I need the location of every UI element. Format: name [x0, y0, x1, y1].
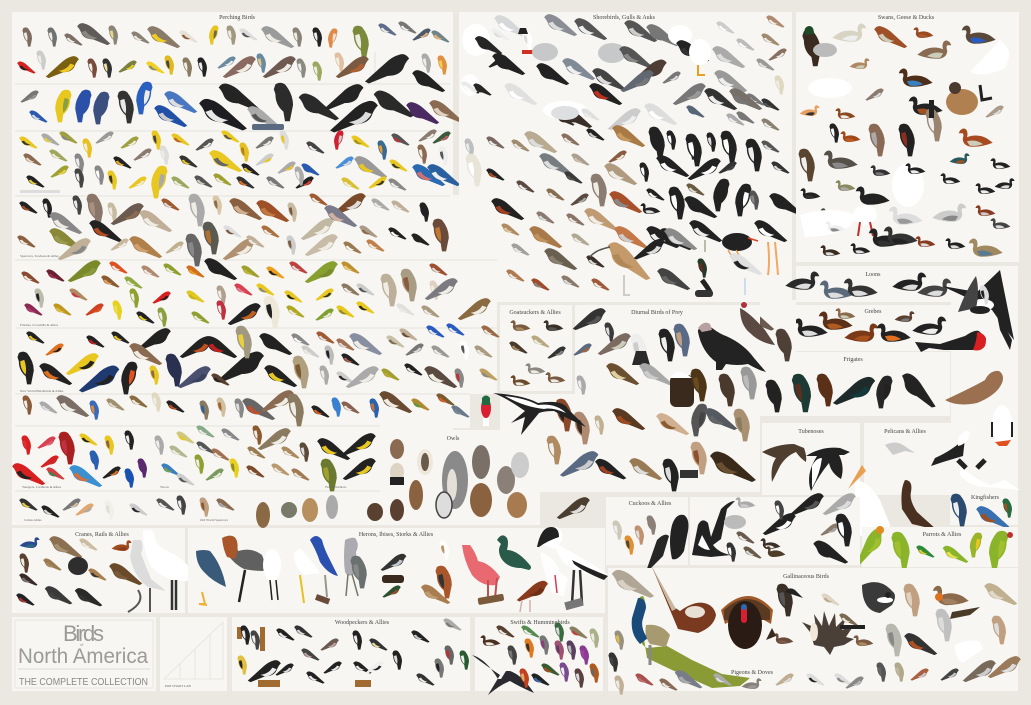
heading: goatsuckers and allies: Goatsuckers & Allies [509, 310, 561, 316]
group: ibises and spoonbills [462, 535, 548, 612]
heading: shorebirds, gulls and auks: Shorebirds, Gulls & Auks [593, 15, 656, 21]
panel: loons [785, 266, 1018, 495]
heading: swans, geese and ducks: Swans, Geese & Ducks [878, 15, 935, 21]
group: waxwings, shrikes, old world sparrows: Cuban Allies [24, 518, 42, 522]
panel: cuckoos and allies [606, 497, 688, 580]
group: oystercatchers and allies [634, 220, 787, 297]
heading: diurnal birds of prey: Diurnal Birds of Prey [631, 309, 683, 316]
group: tanagers and cardinals: Wood-Warblers [325, 485, 347, 489]
group: cormorants [739, 307, 942, 412]
heading: parrots and allies: Parrots & Allies [923, 532, 962, 538]
title: Birds: Birds [63, 621, 104, 646]
heading: kingfishers: Kingfishers [971, 494, 1000, 501]
icon: magnificent frigatebird [915, 270, 1014, 352]
group: swift and hummingbird figures [472, 622, 599, 695]
group: parrot figures [846, 526, 1013, 569]
panel: woodpeckers and allies [232, 617, 470, 691]
group: shearwaters and petrels [692, 493, 856, 564]
group: tanagers and cardinals: Tanagers, Cardinals & Allies [22, 485, 62, 490]
icon: sandhill crane [128, 540, 166, 612]
icon: vulture [698, 302, 775, 372]
heading: gallinaceous birds: Gallinaceous Birds [783, 574, 830, 580]
icon: peacock [632, 596, 750, 688]
heading: grebes: Grebes [864, 309, 882, 315]
panel: title block [12, 617, 156, 691]
panel: parrots and allies [846, 526, 1018, 569]
group: sparrows and allies [17, 193, 449, 266]
group: gulls and terns [461, 14, 787, 131]
group: waxwings, shrikes, old world sparrows: Old World Sparrows [200, 518, 229, 522]
panel: pelicans and allies [848, 405, 1020, 550]
group: owl figures [256, 439, 529, 528]
group: thrushes [22, 390, 470, 426]
heading: owls: Owls [447, 436, 460, 442]
subtitle: the complete collection: THE COMPLETE COLLECTION [19, 677, 148, 688]
group: finches: Finches, Crossbills & Allies [20, 323, 59, 328]
icon: trogon [481, 396, 491, 426]
panel: herons, ibises, storks and allies [188, 527, 608, 613]
panel: gallinaceous birds [608, 567, 1021, 695]
panel: cranes, rails and allies [12, 528, 195, 613]
group: new world flycatchers [17, 21, 450, 92]
panel: perching birds [12, 12, 500, 525]
group: finches [20, 258, 491, 328]
icon: osprey [557, 497, 590, 519]
heading: cranes, rails and allies: Cranes, Rails & Allies [75, 532, 129, 538]
group: blackbirds and orioles: New World Blackbirds & Allies [20, 389, 64, 393]
heading: perching birds: Perching Birds [219, 15, 256, 21]
panel: shorebirds, gulls and auks [459, 12, 802, 302]
panel: tubenoses [762, 423, 860, 495]
group: grouse and partridges [766, 582, 1021, 682]
group: new world warblers [19, 129, 460, 198]
heading: tubenoses: Tubenoses [798, 429, 824, 435]
group: corvids [20, 82, 462, 133]
group: tanagers and cardinals: Vireos [160, 485, 170, 489]
heading: herons, ibises, storks and allies: Herons, Ibises, Storks & Allies [359, 532, 434, 538]
group: sparrows and allies: Sparrows, Towhees & Allies [20, 254, 59, 259]
group: kingfisher figures [950, 494, 1012, 528]
icon: wood stork [537, 527, 608, 610]
title: of: of [80, 642, 84, 647]
heading: frigates: Frigates [843, 357, 863, 363]
group: boobies and anhinga [945, 285, 1007, 427]
panel: grebes [794, 305, 951, 351]
icon: turkey [721, 596, 773, 649]
group: tanagers and cardinals [12, 425, 376, 491]
panel: swans, geese and ducks [796, 12, 1019, 262]
group: blackbirds and orioles [17, 323, 500, 394]
panel: kingfishers [950, 494, 1018, 528]
heading: pigeons and doves: Pigeons & Doves [731, 670, 774, 676]
icon: whooping crane [143, 530, 195, 610]
group: woodpecker figures [237, 618, 469, 687]
group: herons [196, 536, 452, 605]
panel: owls [248, 430, 540, 528]
group: sandpipers and plovers [464, 125, 656, 295]
panel: size guide [160, 617, 227, 691]
heading: swifts and hummingbirds: Swifts & Hummingbirds [510, 619, 570, 626]
group: rails [16, 536, 142, 606]
group: waterfowl [798, 23, 1015, 257]
group: pigeons and doves [608, 630, 864, 695]
icon: swallow-tailed kite [493, 393, 586, 435]
panel: tubenoses lower group [690, 493, 860, 565]
group: albatross figures [762, 444, 850, 491]
group: waxwings, shrikes, old world sparrows [19, 495, 235, 522]
heading: loons: Loons [866, 272, 881, 278]
group: hawks and falcons [547, 308, 757, 491]
panel: swifts and hummingbirds [472, 617, 603, 695]
group: game birds [612, 567, 716, 633]
panel: diurnal birds of prey [493, 302, 775, 519]
panel: size guide: POP CHART LAB [165, 684, 192, 688]
group: grebe figures [794, 308, 946, 342]
group: loon figures [785, 271, 951, 299]
heading: pelicans and allies: Pelicans & Allies [884, 429, 926, 435]
group: nightjar figures [509, 320, 566, 386]
group: auks and puffins [639, 127, 802, 219]
heading: woodpeckers and allies: Woodpeckers & Allies [335, 620, 390, 626]
panel: frigates (cormorants) [739, 270, 1014, 427]
title: North America: North America [18, 645, 148, 668]
panel: nightjars [500, 305, 572, 391]
group: pelicans and boobies [848, 405, 1020, 550]
group: cuckoo figures [612, 515, 688, 580]
heading: cuckoos and allies: Cuckoos & Allies [629, 501, 672, 507]
